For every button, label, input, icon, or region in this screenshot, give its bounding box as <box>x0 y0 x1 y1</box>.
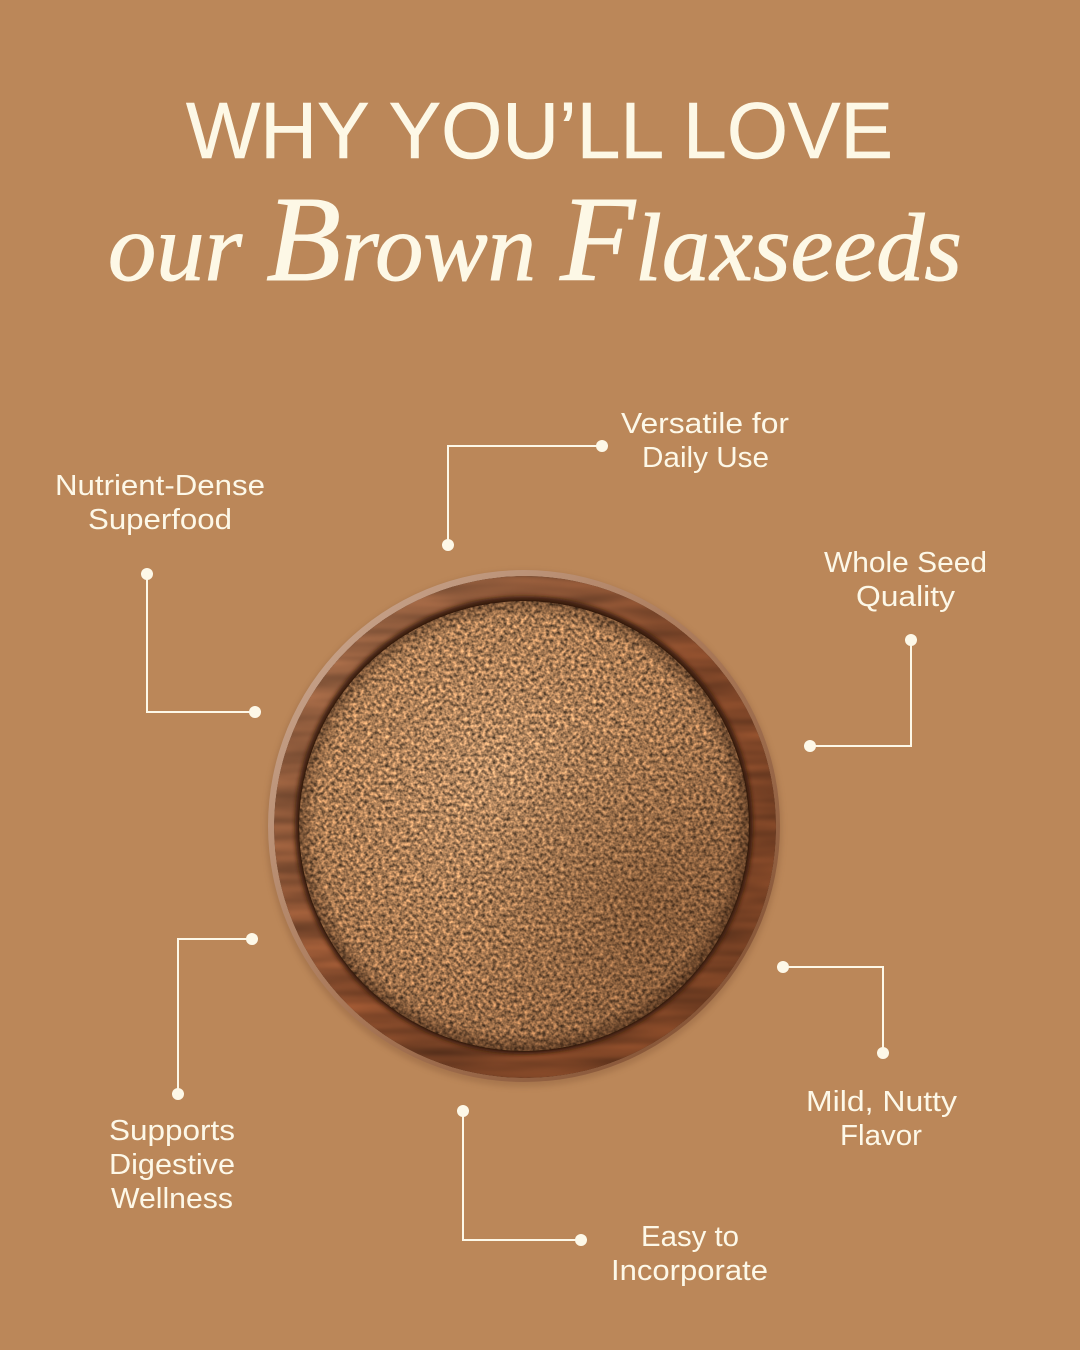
callout: Whole Seed Quality: Quality <box>856 581 956 613</box>
callout: Supports Digestive Wellness: Digestive <box>109 1149 235 1181</box>
callout: Whole Seed Quality: Whole Seed <box>824 547 987 579</box>
callout: Nutrient-Dense Superfood <box>55 470 265 718</box>
callout: Versatile for Daily Use: Daily Use <box>642 442 769 474</box>
callout: Easy to Incorporate <box>457 1105 768 1287</box>
title: script line two: our Brown Flaxseeds <box>108 172 962 307</box>
callout: Mild, Nutty Flavor <box>777 961 958 1152</box>
callout: Easy to Incorporate: Incorporate <box>611 1255 768 1287</box>
callout: Supports Digestive Wellness: Wellness <box>111 1183 233 1215</box>
callout: Nutrient-Dense Superfood: Nutrient-Dense <box>55 470 265 502</box>
callout: Supports Digestive Wellness <box>109 933 258 1215</box>
callout: Whole Seed Quality <box>804 547 987 752</box>
callout: Versatile for Daily Use <box>442 408 789 551</box>
callout: Mild, Nutty Flavor: Flavor <box>840 1120 922 1152</box>
title: line one: WHY YOU’LL LOVE <box>186 86 893 175</box>
callout: Supports Digestive Wellness: Supports <box>109 1115 235 1147</box>
bowl of ground flaxseed <box>266 570 782 1087</box>
callout: Versatile for Daily Use: Versatile for <box>621 408 789 440</box>
callout: Nutrient-Dense Superfood: Superfood <box>88 504 232 536</box>
callout: Mild, Nutty Flavor: Mild, Nutty <box>806 1086 958 1118</box>
callout: Easy to Incorporate: Easy to <box>641 1221 739 1253</box>
